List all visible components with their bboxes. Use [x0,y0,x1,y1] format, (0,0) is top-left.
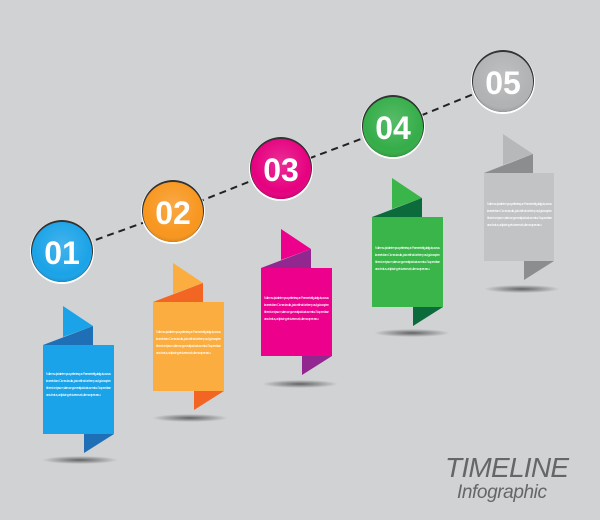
banner 04 [372,178,450,337]
banner 03: Nullam vulputate tempus pellentesque. Praesent et ligula ligula, cursus [264,296,329,300]
circle 05 [471,50,535,114]
step 01 [30,220,118,464]
circle 03: 03 [263,152,299,188]
banner 03: bibendum ipsum, vitae congue erat justo luctus metus. Suspendisse [264,310,329,314]
circle 04: 04 [375,110,411,146]
banner 01: arcu lectus, adipiscing et viverra vel, ullamcorper arcu. [46,393,101,397]
title: TIMELINE Infographic: Infographic [457,482,548,503]
step 03 [249,137,338,388]
banner 05: arcu lectus, adipiscing et viverra vel, ullamcorper arcu. [487,223,542,227]
circle 01 [30,220,94,284]
step 02 [141,180,228,422]
circle 03 [249,137,313,201]
banner 01: laoreet diam. Donec iaculis, justo et tincidunt tempus, ligula sapien [46,379,111,383]
banner 03 [261,229,338,388]
banner 05: Nullam vulputate tempus pellentesque. Praesent et ligula ligula, cursus [487,202,552,206]
title: TIMELINE Infographic [445,452,569,503]
banner 05: bibendum ipsum, vitae congue erat justo luctus metus. Suspendisse [487,216,552,220]
banner 01 [42,306,118,464]
banner 03: arcu lectus, adipiscing et viverra vel, ullamcorper arcu. [264,317,319,321]
banner 02: bibendum ipsum, vitae congue erat justo luctus metus. Suspendisse [156,344,221,348]
step 05 [471,50,560,293]
banner 03: laoreet diam. Donec iaculis, justo et tincidunt tempus, ligula sapien [264,303,329,307]
title: TIMELINE Infographic: TIMELINE [445,452,569,483]
dashed timeline connector [62,82,503,252]
banner 04: Nullam vulputate tempus pellentesque. Praesent et ligula ligula, cursus [375,246,440,250]
banner 02: laoreet diam. Donec iaculis, justo et tincidunt tempus, ligula sapien [156,337,221,341]
circle 05: 05 [485,65,521,101]
banner 01: Nullam vulputate tempus pellentesque. Praesent et ligula ligula, cursus [46,372,111,376]
banner 05: laoreet diam. Donec iaculis, justo et tincidunt tempus, ligula sapien [487,209,552,213]
circle 01: 01 [44,235,80,271]
banner 01: bibendum ipsum, vitae congue erat justo luctus metus. Suspendisse [46,386,111,390]
banner 04: arcu lectus, adipiscing et viverra vel, ullamcorper arcu. [375,267,430,271]
banner 02 [152,263,228,422]
banner 05 [484,134,560,293]
banner 02: Nullam vulputate tempus pellentesque. Praesent et ligula ligula, cursus [156,330,221,334]
circle 02 [141,180,205,244]
circle 02: 02 [155,195,191,231]
banner 04: bibendum ipsum, vitae congue erat justo luctus metus. Suspendisse [375,260,440,264]
banner 02: arcu lectus, adipiscing et viverra vel, ullamcorper arcu. [156,351,211,355]
banner 04: laoreet diam. Donec iaculis, justo et tincidunt tempus, ligula sapien [375,253,440,257]
circle 04 [361,95,425,159]
step 04 [361,95,450,337]
